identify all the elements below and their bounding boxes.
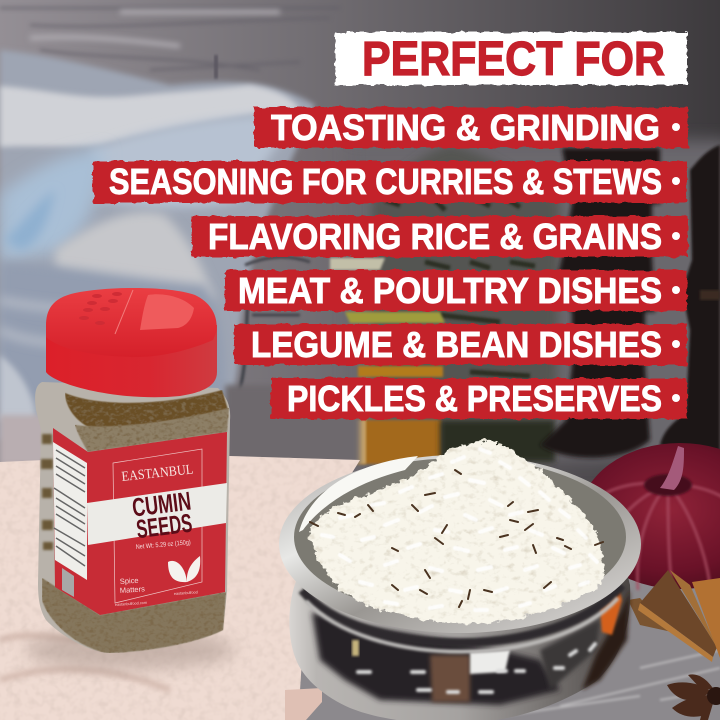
jar bottom seeds xyxy=(42,578,226,653)
jar side seeds xyxy=(41,434,53,550)
banner: perfect for: PERFECT FOR xyxy=(362,33,665,86)
jar top seeds xyxy=(65,390,228,428)
social handle: eastanbulfood xyxy=(174,590,198,596)
spice jar xyxy=(35,288,230,653)
rice grains xyxy=(322,449,597,610)
red label xyxy=(53,428,227,615)
tagline: Spice xyxy=(120,576,139,586)
brand name: EASTANBUL xyxy=(121,463,194,485)
rice mound xyxy=(309,440,604,624)
nutrition lines xyxy=(54,450,85,566)
bowl reflections xyxy=(312,586,630,705)
towel tablecloth xyxy=(0,456,360,720)
bowl interior xyxy=(294,458,626,616)
jar cap xyxy=(46,288,217,397)
jar shadow xyxy=(25,630,235,670)
banner: rice and grains: FLAVORING RICE & GRAINS xyxy=(208,216,662,257)
bowl rim xyxy=(279,455,641,633)
metal bowl xyxy=(279,440,641,720)
net weight: Net Wt: 5.29 oz (150g) xyxy=(136,539,191,551)
pepper mills xyxy=(540,145,720,460)
banner: legume and bean: LEGUME & BEAN DISHES xyxy=(251,324,662,365)
star anise xyxy=(667,674,720,720)
label inner frame xyxy=(113,449,202,603)
website: eastanbulfood.com xyxy=(115,601,147,607)
oil glass bottle xyxy=(330,258,555,464)
banner: pickles and preserves: PICKLES & PRESERVES xyxy=(287,378,662,419)
cinnamon sticks xyxy=(628,570,720,662)
banner: meat and poultry: MEAT & POULTRY DISHES xyxy=(238,270,662,311)
cumin seeds in rice xyxy=(310,470,603,607)
white band xyxy=(87,483,227,545)
banner: toasting and grinding: TOASTING & GRINDING xyxy=(271,107,660,148)
blue-white cloth xyxy=(0,50,315,465)
bowl body xyxy=(289,565,630,720)
spice jar: Matters xyxy=(120,584,145,595)
red onion xyxy=(580,443,720,590)
jar lower shoulder seeds xyxy=(75,408,229,452)
product name: CUMIN xyxy=(130,486,193,523)
bowl neck band xyxy=(302,585,622,643)
product name: SEEDS xyxy=(135,508,194,544)
grey table xyxy=(225,385,720,720)
leaf icon xyxy=(168,556,200,582)
qr code xyxy=(62,568,74,597)
jar body xyxy=(35,382,230,653)
herb plants xyxy=(372,145,560,420)
nutrition panel xyxy=(53,442,87,580)
product name xyxy=(130,486,195,544)
